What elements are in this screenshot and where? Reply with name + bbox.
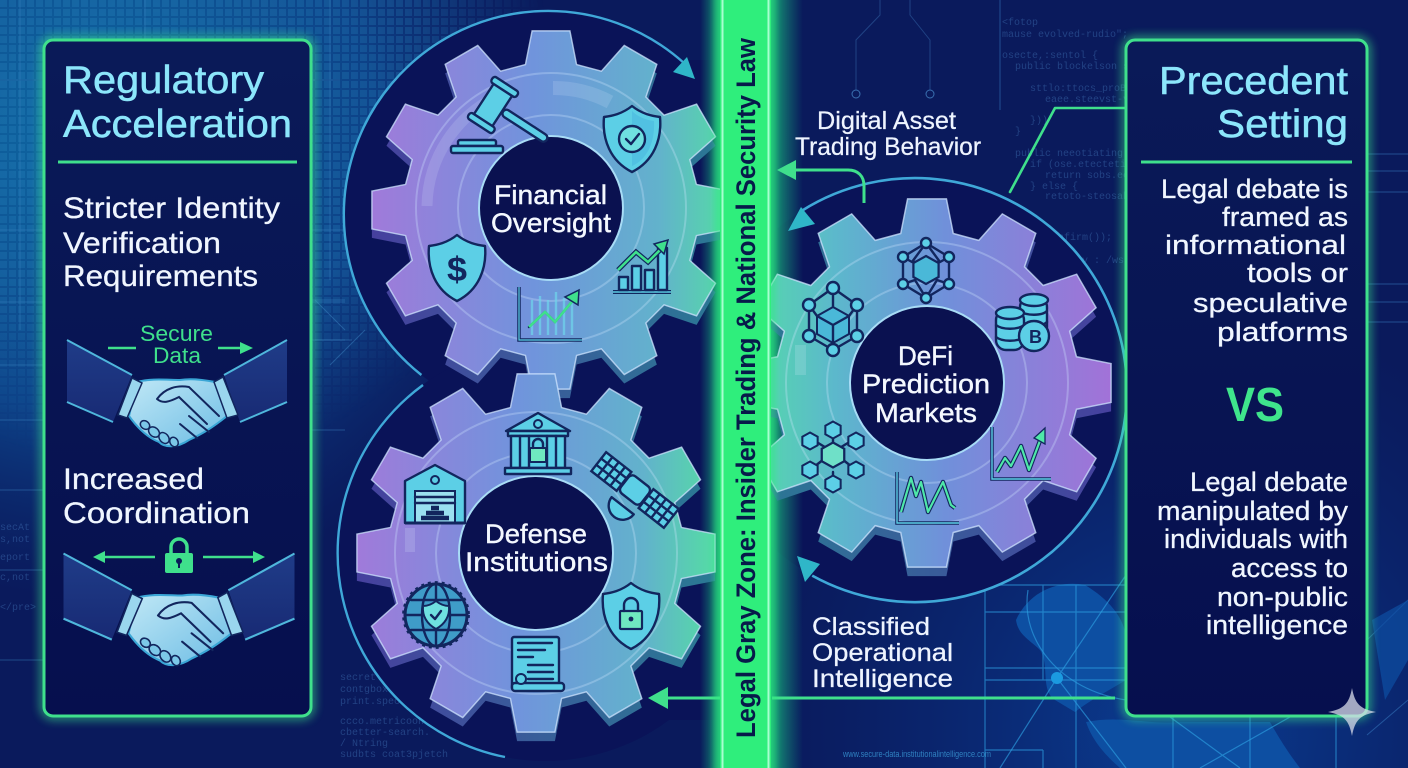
background: (confirm()); [1040, 232, 1112, 244]
background: c,not [0, 573, 30, 584]
background: })) [1030, 115, 1048, 127]
arrow: DeFi rotation arc [788, 178, 1127, 602]
panel heading: precedent setting: Setting [1217, 103, 1348, 146]
text: informational or speculative framing: platforms [1217, 317, 1348, 347]
gear label: defense institutions: Institutions [465, 547, 608, 577]
text: informational or speculative framing [1161, 174, 1348, 347]
background: osecte,:sentol { [1002, 50, 1098, 62]
label: classified operational intelligence [812, 613, 953, 693]
icon: bar chart with arrow [613, 240, 671, 292]
background: public neeotiating() { [1015, 148, 1147, 160]
text: stricter identity verification requirements: Requirements [63, 260, 258, 293]
panel heading: precedent setting: Precedent [1159, 60, 1348, 103]
background: eport [0, 553, 30, 564]
gear label: financial oversight: Oversight [491, 208, 612, 238]
icon: shield dollar [429, 235, 485, 301]
arrow: classified intelligence flow to defense [648, 687, 721, 709]
text: informational or speculative framing: framed as [1222, 202, 1348, 232]
background: print.specific [340, 696, 424, 708]
background: s,not [0, 535, 30, 546]
VS label: VS [1226, 379, 1284, 432]
text: manipulation by insiders: manipulated by [1157, 496, 1349, 526]
gear label: DeFi prediction markets: Markets [875, 398, 977, 428]
background: } [1015, 126, 1021, 138]
label: secure data: Secure [140, 321, 213, 346]
gear label: DeFi prediction markets: DeFi [898, 341, 953, 371]
label: secure data [140, 321, 213, 368]
gear backdrop discs [337, 0, 1127, 768]
connector: precedent panel to DeFi arc [1010, 108, 1126, 192]
hub: financial oversight [479, 136, 623, 280]
label: classified operational intelligence: Operational [812, 639, 953, 667]
icon: rising line chart [992, 427, 1051, 479]
text: manipulation by insiders: intelligence [1206, 610, 1348, 640]
text: informational or speculative framing: Legal debate is [1161, 174, 1348, 204]
icon: line chart with arrow [519, 287, 582, 340]
background: retoto-steosahli. [1045, 191, 1147, 203]
text: manipulation by insiders [1157, 467, 1349, 640]
label: digital asset trading behavior: Digital Asset [817, 107, 956, 135]
text: manipulation by insiders: Legal debate [1190, 467, 1348, 497]
background: } else { [1030, 181, 1078, 193]
background: eaee.steevst-v [1045, 95, 1129, 106]
text: stricter identity verification requirements: Stricter Identity [63, 192, 280, 225]
label: digital asset trading behavior [795, 107, 981, 161]
icon: shield dollar: $ [447, 251, 467, 289]
icon: gavel [451, 76, 560, 161]
icon: coordination handshake [64, 554, 295, 667]
text: manipulation by insiders: access to [1231, 553, 1348, 583]
background: sudbts coat3pjetch [340, 749, 448, 761]
icon: volatile line chart [897, 472, 959, 523]
icon: sparkle watermark [1328, 688, 1376, 736]
text: manipulation by insiders: individuals with [1164, 524, 1348, 554]
background: mause evolved-rudio"; [1002, 29, 1128, 41]
background: public blockelson soal [1015, 61, 1147, 73]
icon: satellite [578, 452, 679, 545]
background: security : /ws-eoor [1040, 255, 1154, 267]
background: </pre> [0, 602, 36, 614]
text: informational or speculative framing: informational [1165, 230, 1346, 260]
arrow: defense institutions rotation arc [338, 385, 505, 757]
background: cbetter-search. [340, 727, 430, 739]
icon: bank with lock [505, 413, 571, 474]
hub: defense institutions [459, 476, 613, 630]
gear: financial oversight [372, 31, 730, 398]
hub: DeFi prediction markets [850, 306, 1004, 460]
text: manipulation by insiders: non-public [1217, 582, 1348, 612]
icon: bitcoin coin stacks: B [1029, 327, 1042, 347]
icon: secure data handshake [67, 340, 287, 448]
background: / Ntring [340, 738, 388, 750]
background: ccco.metricoon.. [340, 716, 436, 728]
icon: hexagon block network [898, 238, 954, 303]
background: contgbox: [340, 684, 394, 696]
arrows: secure data [108, 342, 253, 354]
panel heading: regulatory acceleration: Regulatory [63, 59, 265, 102]
arrow: classified intelligence flow to right [772, 696, 1115, 700]
gear label: DeFi prediction markets [862, 341, 990, 428]
icon: coordination arrows and lock [93, 539, 265, 573]
gear label: financial oversight [491, 180, 612, 238]
text: increased coordination: Increased [63, 463, 204, 496]
background: sttlo:ttocs_proBabc [1030, 83, 1144, 95]
icon: shield check [604, 106, 660, 172]
label: secure data: Data [153, 343, 202, 368]
icon: bitcoin coin stacks [996, 294, 1049, 351]
icon: legal document [512, 637, 564, 691]
text: increased coordination [63, 463, 250, 530]
bar label: Legal Gray Zone: Insider Trading & National Security Law [731, 37, 761, 738]
icon: shield lock [603, 583, 659, 649]
background: secret [340, 673, 376, 684]
panel heading: precedent setting [1159, 60, 1348, 146]
icon: cube network [803, 282, 863, 356]
central vertical bar: legal gray zone [714, 0, 776, 768]
icon: warehouse with gold [405, 465, 465, 523]
icon: secure globe [403, 582, 469, 648]
panel: precedent setting [1126, 40, 1367, 716]
gear: DeFi prediction markets [743, 199, 1111, 576]
text: informational or speculative framing: speculative [1193, 288, 1348, 318]
arrow: financial oversight rotation arc [344, 11, 695, 375]
label: digital asset trading behavior: Trading Behavior [795, 133, 981, 161]
gear label: financial oversight: Financial [494, 180, 607, 210]
gear label: defense institutions: Defense [485, 519, 587, 549]
panel: regulatory acceleration [44, 40, 311, 716]
background: return sobs.eoms [1045, 170, 1141, 182]
gear label: DeFi prediction markets: Prediction [862, 369, 990, 399]
footer url: www.secure-data.institutionalintelligence.com [842, 749, 991, 760]
text: increased coordination: Coordination [63, 497, 250, 530]
panel heading: regulatory acceleration: Acceleration [63, 103, 292, 146]
text: stricter identity verification requirements: Verification [63, 227, 221, 260]
panel heading: regulatory acceleration [63, 59, 292, 146]
text: informational or speculative framing: tools or [1247, 258, 1348, 288]
gear: defense institutions [357, 374, 715, 741]
label: classified operational intelligence: Classified [812, 613, 930, 641]
background: <fotop [1002, 17, 1038, 29]
text: stricter identity verification requirements [63, 192, 280, 293]
background: secAt [0, 523, 30, 534]
gear label: defense institutions [465, 519, 608, 577]
background: if (ose.etectetien: [1030, 159, 1144, 171]
label: classified operational intelligence: Intelligence [812, 665, 953, 693]
arrow: digital asset trading flow [777, 160, 864, 203]
icon: cube cluster [802, 422, 864, 492]
